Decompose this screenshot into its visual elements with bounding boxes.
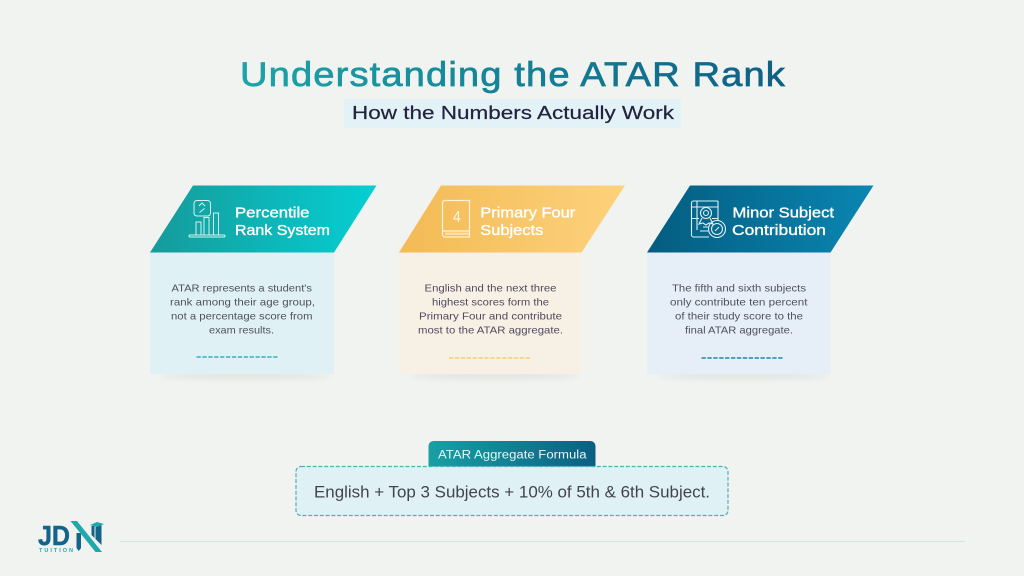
formula tab: ATAR Aggregate Formula	[438, 450, 587, 462]
heading	[732, 206, 834, 239]
heading: Subjects	[480, 223, 543, 239]
heading: Primary Four	[480, 206, 575, 222]
text block	[418, 282, 563, 336]
formula box	[296, 466, 728, 516]
text block: not a percentage score from	[171, 310, 313, 322]
panel: percentile rank system	[150, 186, 376, 379]
formula tab	[428, 441, 596, 468]
callout: ATAR aggregate formula	[296, 441, 728, 516]
text block: most to the ATAR aggregate.	[418, 324, 563, 336]
formula box: English + Top 3 Subjects + 10% of 5th & 6th Subject.	[314, 482, 710, 502]
icon: book with number 4: 4	[453, 209, 461, 226]
text block: ATAR represents a student's	[172, 282, 312, 294]
heading: Rank System	[235, 223, 330, 239]
text block	[670, 282, 808, 336]
heading: Percentile	[235, 206, 310, 222]
icon: book with number 4	[442, 200, 470, 237]
heading	[235, 206, 330, 239]
panel: minor subject contribution	[647, 186, 874, 379]
logo: JDN Tuition: JD	[38, 520, 70, 551]
text block: only contribute ten percent	[670, 296, 808, 308]
text block: The fifth and sixth subjects	[672, 282, 806, 294]
text block: final ATAR aggregate.	[685, 324, 793, 336]
panel: primary four subjects	[399, 186, 625, 379]
logo: JDN Tuition: TUITION	[39, 548, 73, 554]
icon: certificate with gauge	[692, 201, 726, 238]
text block	[170, 282, 315, 336]
text block: English and the next three	[424, 282, 557, 294]
text block: of their study score to the	[675, 310, 803, 322]
icon: percent badge and bar chart	[189, 200, 225, 237]
heading: Contribution	[732, 223, 826, 239]
logo: JDN Tuition	[38, 520, 104, 554]
subtitle: How the Numbers Actually Work	[352, 103, 675, 123]
title: Understanding the ATAR Rank	[240, 56, 786, 94]
text block: rank among their age group,	[170, 296, 315, 308]
subtitle	[344, 99, 681, 128]
text block: exam results.	[209, 324, 274, 336]
text block: highest scores form the	[432, 296, 549, 308]
heading: Minor Subject	[732, 206, 834, 222]
text block: Primary Four and contribute	[419, 310, 562, 322]
heading	[480, 206, 575, 239]
